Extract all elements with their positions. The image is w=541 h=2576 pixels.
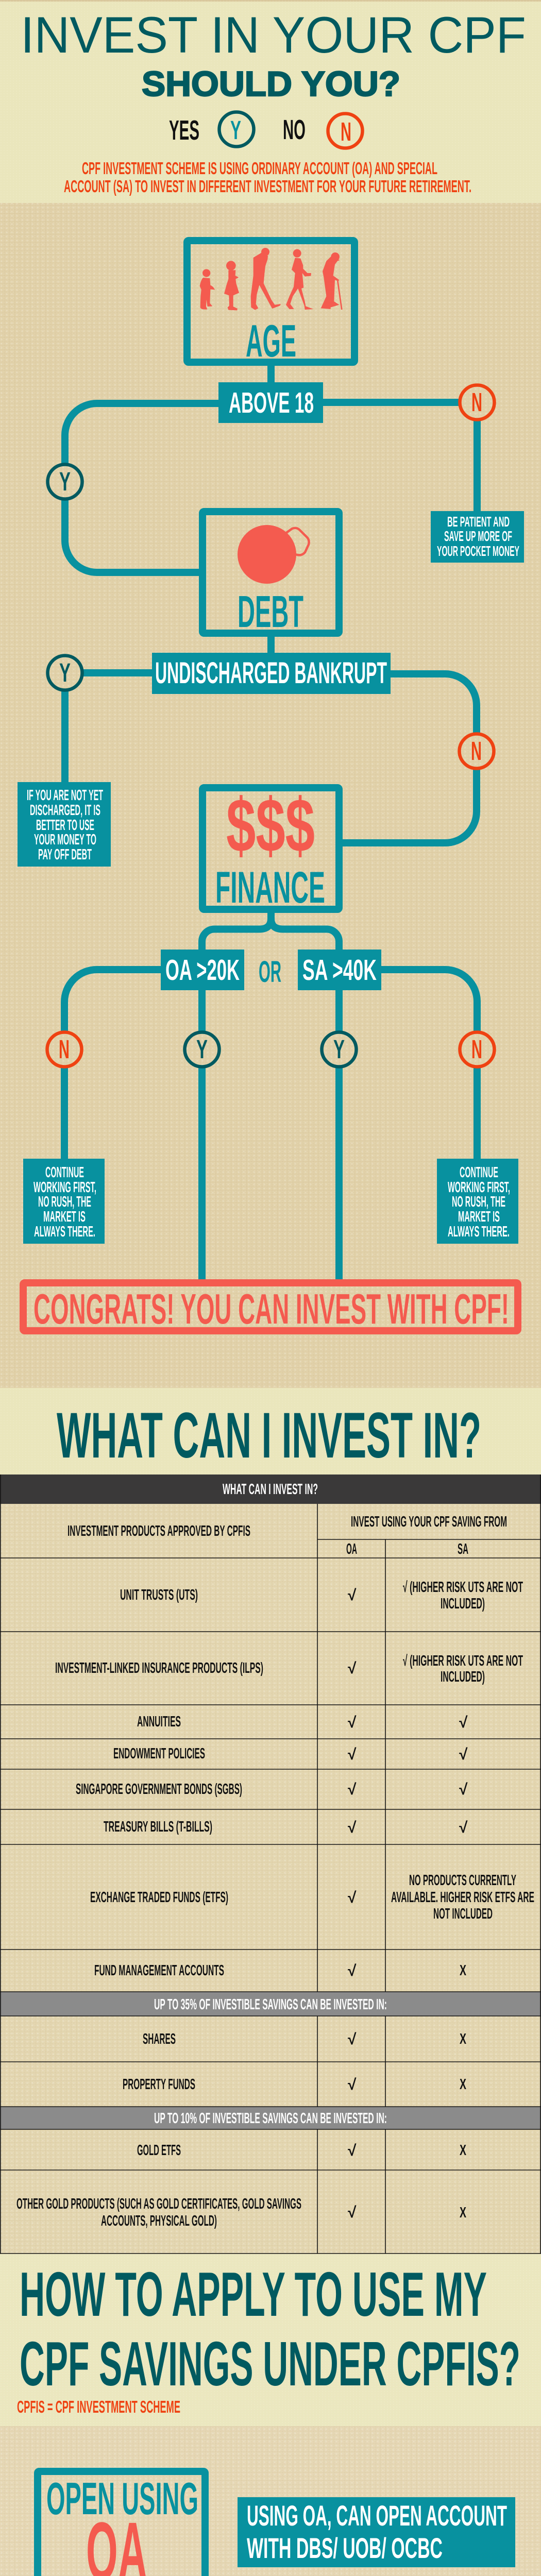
row: singapore government bonds: √: [348, 1781, 357, 1798]
panel: debt: [202, 512, 339, 637]
row: other gold products: [16, 2196, 466, 2229]
panel: age: AGE: [246, 315, 296, 366]
panel: open using OA: OPEN USING: [46, 2473, 198, 2524]
row: annuities: √: [459, 1714, 468, 1731]
row: endowment policies: ENDOWMENT POLICIES: [113, 1745, 205, 1762]
row: fund management accounts: √: [348, 1962, 357, 1979]
decision: SA above 40K: [298, 950, 381, 990]
callout: OA account: [238, 2497, 515, 2567]
row: treasury bills: √: [459, 1819, 468, 1836]
column headers: OA: [346, 1541, 357, 1557]
row: other gold products: √: [348, 2204, 357, 2221]
row: singapore government bonds: √: [459, 1781, 468, 1798]
panel: age: [187, 241, 354, 366]
callout: pay off debt: [18, 782, 111, 867]
row: annuities: √: [348, 1714, 357, 1731]
row: endowment policies: [113, 1745, 468, 1763]
marker: yes, above 18: [47, 465, 82, 499]
row: gold ETFs: [137, 2142, 466, 2159]
row: investment-linked insurance products: [55, 1653, 523, 1685]
flow connectors: [64, 366, 477, 1279]
row: property funds: X: [460, 2076, 466, 2093]
legend: yes and no: N: [341, 117, 351, 146]
panel: open using OA: [38, 2471, 205, 2576]
marker: yes, above 18: Y: [59, 467, 71, 496]
marker: yes, OA: [184, 1032, 219, 1066]
row: annuities: [137, 1714, 468, 1731]
marker: no, OA: [47, 1032, 81, 1066]
label: or: OR: [259, 955, 281, 989]
intro text: [64, 159, 471, 196]
row: treasury bills: TREASURY BILLS (T-BILLS): [104, 1819, 212, 1835]
section bar: up to 35 percent: [0, 1992, 541, 2016]
legend: yes and no: Y: [230, 115, 241, 145]
callout: continue working, left: MARKET IS: [43, 1209, 86, 1225]
heading: how to apply: [20, 2259, 520, 2399]
callout: pay off debt: DISCHARGED, IT IS: [30, 802, 100, 819]
row: exchange traded funds: [90, 1872, 534, 1922]
column headers: [67, 1514, 507, 1557]
legend: yes and no: NO: [283, 114, 306, 145]
row: fund management accounts: FUND MANAGEMENT ACCOUNTS: [94, 1962, 224, 1979]
marker: yes, bankrupt: Y: [59, 658, 71, 687]
background: tan table panel: [0, 1475, 541, 2253]
row: treasury bills: [104, 1819, 468, 1836]
row: endowment policies: √: [459, 1746, 468, 1763]
marker: yes, OA: Y: [196, 1035, 208, 1064]
decision: undischarged bankrupt: [152, 653, 391, 694]
callout: continue working, left: NO RUSH, THE: [38, 1194, 91, 1210]
marker: no, bankrupt: N: [471, 736, 482, 766]
legend: yes and no: [169, 112, 363, 148]
marker: yes, bankrupt: [47, 655, 82, 690]
callout: be patient: [431, 511, 524, 563]
row: gold ETFs: GOLD ETFS: [137, 2142, 181, 2159]
marker: no, SA: N: [471, 1035, 482, 1064]
decision: above 18: ABOVE 18: [229, 386, 314, 419]
row: other gold products: ACCOUNTS, PHYSICAL GOLD): [101, 2213, 217, 2229]
row: property funds: [123, 2076, 466, 2093]
icon: ball and chain: [238, 525, 309, 584]
row: other gold products: X: [460, 2205, 466, 2221]
row: annuities: ANNUITIES: [137, 1714, 181, 1730]
icon: people ageing silhouettes: [200, 248, 342, 310]
row: endowment policies: √: [348, 1746, 357, 1763]
callout: pay off debt: YOUR MONEY TO: [34, 832, 96, 848]
callout: continue working, right: CONTINUE: [460, 1164, 498, 1181]
row: fund management accounts: [94, 1962, 466, 1979]
subtitle: SHOULD YOU?: [142, 64, 400, 104]
panel: debt: DEBT: [238, 587, 303, 637]
row: property funds: PROPERTY FUNDS: [123, 2076, 195, 2093]
marker: no, above 18: N: [471, 387, 482, 417]
callout: pay off debt: IF YOU ARE NOT YET: [27, 787, 103, 804]
legend: yes and no: YES: [169, 115, 199, 146]
table header bar: [0, 1475, 541, 1504]
callout: continue working, left: CONTINUE: [45, 1164, 84, 1181]
decision: OA above 20K: [161, 950, 244, 990]
marker: no, bankrupt: [460, 734, 494, 769]
callout: continue working, left: [23, 1159, 105, 1244]
panel: finance: FINANCE: [215, 863, 325, 912]
row: shares: X: [460, 2031, 466, 2047]
row: treasury bills: √: [348, 1819, 357, 1836]
table header bar: WHAT CAN I INVEST IN?: [223, 1481, 318, 1498]
background: tan flowchart panel: [0, 203, 541, 1388]
callout: pay off debt: PAY OFF DEBT: [38, 846, 92, 863]
row: shares: √: [348, 2031, 357, 2048]
marker: no, OA: N: [59, 1035, 70, 1064]
marker: yes, SA: Y: [333, 1035, 345, 1064]
icon: dollar signs: $$$: [226, 783, 315, 868]
table grid: [0, 1475, 541, 2253]
table: investment products: [0, 1475, 541, 2253]
background: light apply heading band: [0, 2253, 541, 2426]
section bar: up to 10 percent: [0, 2107, 541, 2129]
row: unit trusts: [120, 1579, 523, 1612]
row: unit trusts: INCLUDED): [441, 1596, 485, 1612]
decision: SA above 40K: SA >40K: [302, 954, 377, 987]
row: shares: [143, 2031, 466, 2048]
panel: finance: [202, 783, 339, 912]
background: light heading band: [0, 1388, 541, 1475]
marker: no, above 18: [460, 385, 495, 419]
callout: continue working, right: MARKET IS: [458, 1209, 500, 1225]
row: shares: SHARES: [143, 2031, 176, 2047]
row: gold ETFs: √: [348, 2142, 357, 2159]
title: INVEST IN YOUR CPF: [21, 6, 526, 63]
callout: continue working, left: ALWAYS THERE.: [34, 1224, 95, 1240]
row: exchange traded funds: √: [348, 1889, 357, 1906]
row: gold ETFs: X: [460, 2142, 466, 2159]
row: unit trusts: √: [348, 1587, 357, 1604]
decision: above 18: [218, 382, 323, 423]
note: CPFIS definition: CPFIS = CPF INVESTMENT SCHEME: [17, 2397, 180, 2416]
row: investment-linked insurance products: √: [348, 1660, 357, 1677]
background: tan apply panel: [0, 2426, 541, 2576]
callout: continue working, right: [437, 1159, 518, 1244]
column headers: SA: [458, 1541, 468, 1557]
callout: continue working, left: WORKING FIRST,: [33, 1179, 96, 1196]
callout: pay off debt: BETTER TO USE: [36, 817, 94, 834]
column headers: INVESTMENT PRODUCTS APPROVED BY CPFIS: [67, 1523, 250, 1539]
row: exchange traded funds: EXCHANGE TRADED FUNDS (ETFS): [90, 1889, 228, 1906]
marker: yes, SA: [322, 1032, 357, 1066]
row: property funds: √: [348, 2076, 357, 2093]
marker: no, SA: [460, 1032, 495, 1066]
row: investment-linked insurance products: INCLUDED): [441, 1669, 485, 1685]
row: unit trusts: UNIT TRUSTS (UTS): [120, 1587, 198, 1603]
decision: OA above 20K: OA >20K: [165, 954, 240, 987]
background: light header band: [0, 0, 541, 203]
row: singapore government bonds: SINGAPORE GOVERNMENT BONDS (SGBS): [76, 1781, 242, 1798]
row: investment-linked insurance products: INVESTMENT-LINKED INSURANCE PRODUCTS (ILPS): [55, 1660, 263, 1676]
row: fund management accounts: X: [460, 1962, 466, 1979]
